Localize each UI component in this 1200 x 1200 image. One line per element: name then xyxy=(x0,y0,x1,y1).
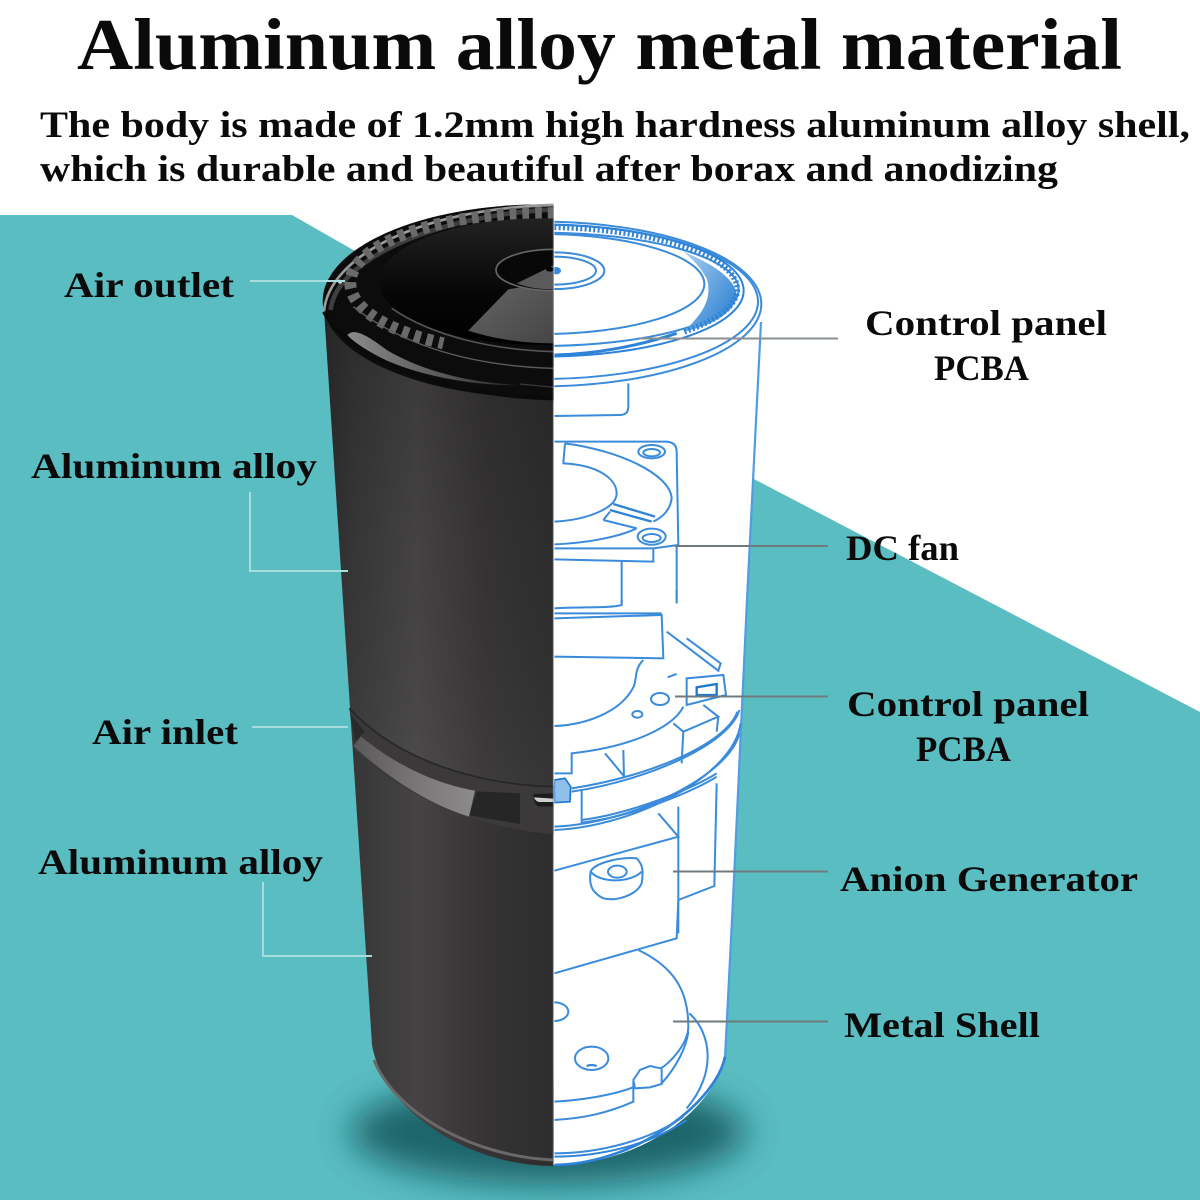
wireframe middle section xyxy=(554,590,741,933)
leader: aluminum alloy lower xyxy=(263,882,372,956)
title: Aluminum alloy metal material xyxy=(77,4,1122,85)
top disc outline xyxy=(554,233,706,335)
subtitle text block: which is durable and beautiful after borax and anodizing xyxy=(40,149,1059,190)
upper body shading xyxy=(324,318,422,398)
top disc xyxy=(394,218,554,345)
ring band xyxy=(572,710,739,792)
label: aluminum alloy lower: Aluminum alloy xyxy=(38,842,323,882)
metal shell disc xyxy=(540,950,708,1120)
white body fill xyxy=(554,364,752,1165)
rim highlights xyxy=(392,308,554,352)
leader: DC fan xyxy=(675,545,828,547)
label: metal shell: Metal Shell xyxy=(844,1005,1040,1045)
label: control panel PCBA top xyxy=(865,303,1107,388)
purifier: dark exterior half xyxy=(322,204,554,1166)
leader: control panel top xyxy=(640,338,838,340)
subtitle text block: The body is made of 1.2mm high hardness aluminum alloy shell, xyxy=(40,105,1190,146)
lower rim thickened arc xyxy=(554,333,677,355)
centre button xyxy=(495,248,554,292)
label: DC fan: DC fan xyxy=(846,528,959,568)
leader: control panel middle xyxy=(675,696,828,698)
label: control panel PCBA middle: PCBA xyxy=(916,729,1011,769)
grey wedge xyxy=(468,288,554,344)
purifier: white wireframe half xyxy=(554,220,762,1166)
label: control panel PCBA top: PCBA xyxy=(934,348,1029,388)
label: aluminum alloy upper: Aluminum alloy xyxy=(31,446,317,486)
USB socket xyxy=(554,778,571,803)
vent ring xyxy=(350,213,554,343)
label: control panel PCBA top: Control panel xyxy=(865,303,1107,343)
leader: air inlet xyxy=(252,726,348,728)
sub-panel bracket xyxy=(554,383,628,416)
anion generator block xyxy=(554,783,717,933)
control panel PCBA board xyxy=(554,632,726,773)
aluminum alloy body xyxy=(324,300,553,1166)
DC fan xyxy=(554,442,678,603)
bottom outer shell xyxy=(554,1057,725,1165)
air inlet band xyxy=(349,708,554,834)
blue vent crescent xyxy=(683,252,737,332)
outer rim xyxy=(324,205,554,312)
label: control panel PCBA middle xyxy=(847,684,1089,769)
upper bracket block xyxy=(554,613,663,658)
bottom edge highlight xyxy=(374,1060,553,1160)
label: air outlet: Air outlet xyxy=(64,265,234,305)
leader: metal shell xyxy=(673,1020,828,1022)
top cap xyxy=(322,204,554,400)
label: anion generator: Anion Generator xyxy=(840,859,1138,899)
leader: air outlet xyxy=(250,280,345,282)
subtitle text block xyxy=(40,105,1190,190)
ground shadow under purifier xyxy=(350,1080,746,1184)
right wall xyxy=(725,322,761,1058)
centre button rings xyxy=(554,251,606,290)
wireframe bottom section xyxy=(540,900,725,1165)
top rim rings xyxy=(554,220,762,388)
label: control panel PCBA middle: Control panel xyxy=(847,684,1089,724)
leader: anion generator xyxy=(673,870,828,872)
leader: aluminum alloy upper xyxy=(250,492,348,571)
center divider xyxy=(552,205,554,1165)
wireframe top section xyxy=(554,220,762,604)
vent dashes xyxy=(554,227,737,332)
label: air inlet: Air inlet xyxy=(92,712,238,752)
